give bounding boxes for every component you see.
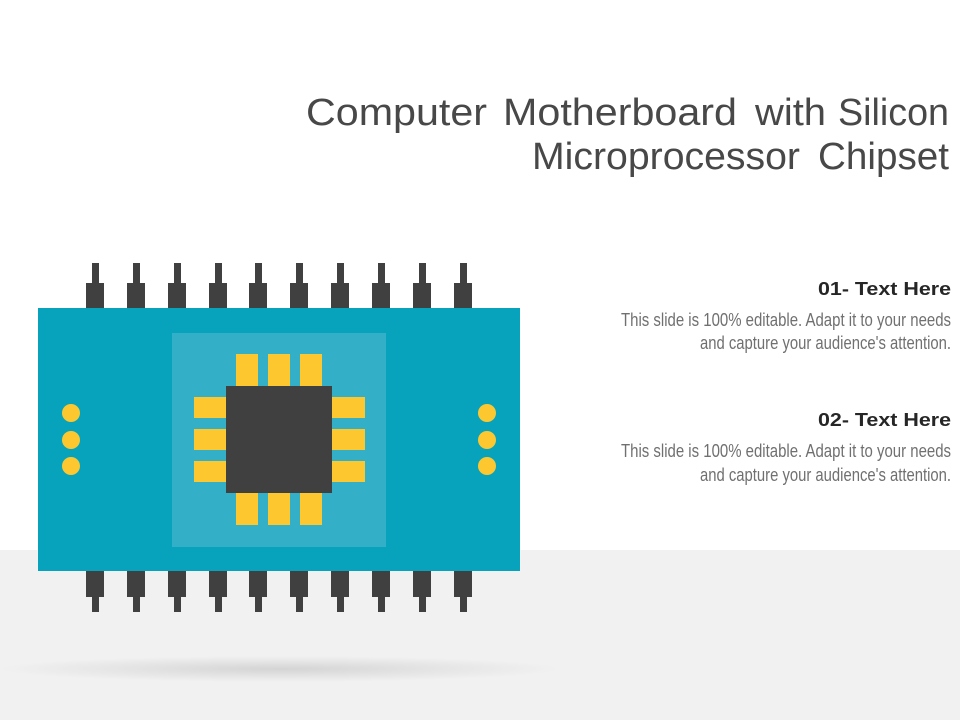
right indicator dots <box>478 404 496 475</box>
text block 01 <box>621 279 951 353</box>
text block 02: 02- Text Here <box>818 410 951 430</box>
processor die <box>226 386 332 493</box>
title: Motherboard <box>503 92 737 134</box>
top pins <box>86 263 472 308</box>
text block 02 <box>621 410 951 485</box>
title: Microprocessor <box>532 136 800 178</box>
text block 01: 01- Text Here <box>818 279 951 299</box>
title: with <box>754 92 826 134</box>
title: Chipset <box>818 136 949 178</box>
title: Silicon <box>838 92 949 134</box>
board <box>38 308 520 571</box>
yellow contact pads <box>194 354 365 525</box>
floor band <box>0 550 960 720</box>
bottom pins <box>86 571 472 612</box>
left indicator dots <box>62 404 80 475</box>
title: Computer <box>306 92 487 134</box>
icon: microchip on circuit board <box>38 263 520 612</box>
inner panel <box>172 333 386 547</box>
title <box>306 92 949 178</box>
ground shadow <box>0 656 560 682</box>
